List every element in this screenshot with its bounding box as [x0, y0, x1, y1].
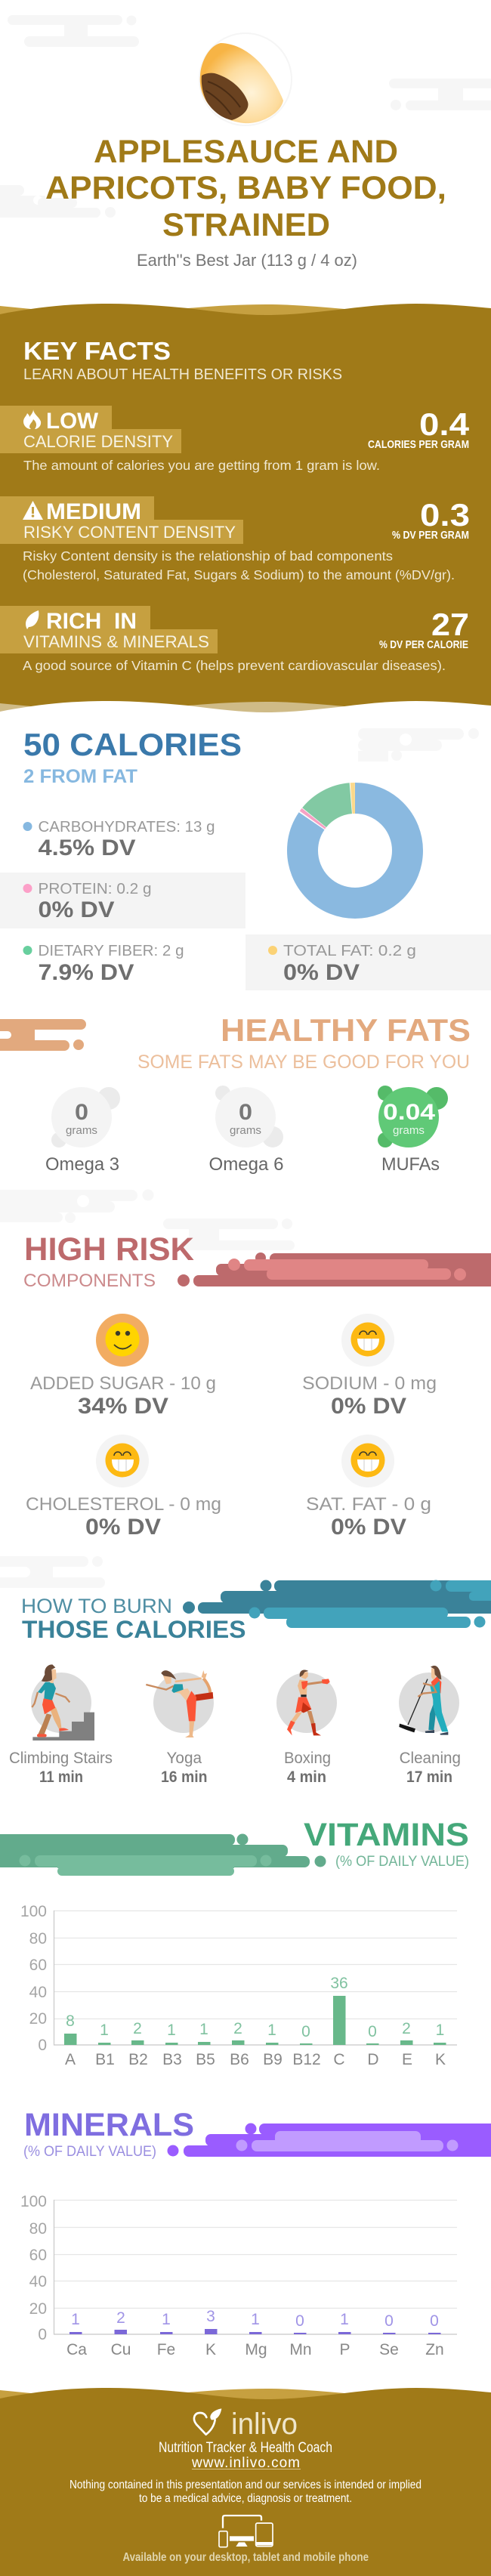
- fact: low calorie density: The amount of calories you are getting from 1 gram is low.: [23, 458, 380, 473]
- bar chart: minerals: 80: [29, 2220, 47, 2238]
- icon: boxer: [287, 1670, 330, 1735]
- heading: minerals: MINERALS: [24, 2107, 194, 2143]
- bar chart: minerals: K: [205, 2341, 216, 2358]
- bar chart: minerals: 1: [71, 2311, 80, 2328]
- bar chart: vitamins: C: [333, 2051, 345, 2068]
- bar chart: vitamins: 8: [66, 2012, 75, 2030]
- bar chart: minerals: 0: [295, 2312, 304, 2330]
- fact: medium risky content density: 0.3: [420, 497, 470, 533]
- item: total fat: 0% DV: [283, 960, 360, 985]
- icon: apricot: [199, 33, 292, 125]
- item: cholesterol: [26, 1435, 221, 1540]
- item: omega 6: [208, 1086, 284, 1175]
- disclaimer: [69, 2479, 422, 2505]
- disclaimer: Nothing contained in this presentation and our services is intended or implied: [69, 2479, 422, 2491]
- item: dietary fiber: [23, 943, 184, 985]
- bar chart: vitamins: B9: [263, 2051, 283, 2068]
- tagline: Nutrition Tracker & Health Coach: [159, 2440, 332, 2456]
- icon: warning triangle: [23, 501, 43, 520]
- activity: yoga: Yoga: [166, 1750, 202, 1767]
- bar chart: vitamins: B3: [162, 2051, 182, 2068]
- heading: healthy fats: HEALTHY FATS: [221, 1012, 471, 1048]
- fact: rich in vitamins and minerals: % DV PER CALORIE: [379, 639, 468, 651]
- bar chart: minerals: Ca: [66, 2341, 87, 2358]
- bar chart: minerals: 1: [162, 2311, 171, 2328]
- fact: rich in vitamins and minerals: VITAMINS & MINERALS: [23, 632, 209, 651]
- item: omega 3: [45, 1087, 120, 1175]
- subheading: LEARN ABOUT HEALTH BENEFITS OR RISKS: [23, 366, 342, 383]
- bar chart: minerals: P: [339, 2341, 350, 2358]
- fact: medium risky content density: RISKY CONTENT DENSITY: [23, 523, 236, 542]
- fact: medium risky content density: [0, 496, 470, 582]
- bar chart: minerals: 0: [384, 2312, 394, 2330]
- bar chart: minerals: Mn: [289, 2341, 312, 2358]
- disclaimer: to be a medical advice, diagnosis or treatment.: [139, 2492, 352, 2505]
- bar chart: vitamins: 60: [29, 1957, 47, 1974]
- bar chart: vitamins: 40: [29, 1984, 47, 2001]
- bar chart: vitamins: A: [65, 2051, 76, 2068]
- item: MUFAs: MUFAs: [381, 1154, 440, 1175]
- item: sodium: [302, 1314, 437, 1419]
- bar chart: minerals: [20, 2193, 457, 2358]
- icon: woman on stairs: [32, 1664, 94, 1740]
- bar chart: vitamins: B12: [292, 2051, 321, 2068]
- activity: boxing: 4 min: [287, 1768, 326, 1786]
- bar chart: vitamins: B6: [230, 2051, 249, 2068]
- panel: healthy fats: [0, 1012, 471, 1175]
- bar chart: vitamins: 1: [199, 2021, 208, 2038]
- subheading: from fat: 2 FROM FAT: [23, 766, 137, 787]
- activity: climbing stairs: [9, 1664, 113, 1786]
- item: total fat: [268, 943, 416, 985]
- title: [45, 134, 446, 243]
- item: MUFAs: [378, 1086, 448, 1175]
- item: MUFAs: grams: [393, 1124, 425, 1137]
- panel: vitamins: [0, 1817, 469, 2068]
- activity: cleaning: 17 min: [406, 1768, 452, 1786]
- bar chart: vitamins: 1: [267, 2022, 276, 2039]
- item: added sugar: [30, 1314, 216, 1419]
- panel: key facts: [0, 304, 491, 721]
- icon: woman in yoga pose: [146, 1670, 213, 1737]
- activity: boxing: [276, 1670, 337, 1786]
- decoration: green cloud: [0, 1834, 326, 1876]
- bar chart: minerals: Se: [379, 2341, 399, 2358]
- subheading: (% OF DAILY VALUE): [335, 1854, 469, 1870]
- decoration: teal cloud: [183, 1580, 491, 1628]
- heading: 50 calories: 50 CALORIES: [23, 727, 242, 762]
- bar chart: vitamins: 2: [133, 2020, 142, 2037]
- fact: medium risky content density: MEDIUM: [46, 499, 141, 524]
- heading: those calories: THOSE CALORIES: [22, 1616, 246, 1643]
- activity: yoga: 16 min: [161, 1768, 207, 1786]
- heading: key facts: KEY FACTS: [23, 337, 171, 365]
- icon: inlivo heart logo: [194, 2408, 221, 2435]
- item: omega 6: grams: [230, 1124, 261, 1137]
- bar chart: vitamins: E: [402, 2051, 412, 2068]
- bar chart: vitamins: 20: [29, 2010, 47, 2028]
- icon: leaf: [26, 610, 39, 629]
- fact: rich in vitamins and minerals: RICH IN: [46, 609, 137, 634]
- bar chart: vitamins: 1: [100, 2022, 109, 2039]
- subheading: SOME FATS MAY BE GOOD FOR YOU: [137, 1052, 470, 1073]
- bar chart: minerals: Mg: [245, 2341, 267, 2358]
- bar chart: vitamins: 0: [38, 2037, 47, 2054]
- bar chart: vitamins: D: [367, 2051, 379, 2068]
- bar chart: vitamins: K: [435, 2051, 446, 2068]
- bar chart: minerals: Fe: [157, 2341, 175, 2358]
- activity: yoga: [146, 1670, 214, 1786]
- item: dietary fiber: DIETARY FIBER: 2 g: [38, 943, 184, 959]
- bar chart: vitamins: 2: [402, 2020, 411, 2037]
- bar chart: minerals: Cu: [111, 2341, 131, 2358]
- decoration: purple cloud: [168, 2123, 491, 2157]
- website link: www.inlivo.com: [191, 2455, 300, 2471]
- fact: medium risky content density: (Cholesterol, Saturated Fat, Sugars & Sodium) to the amount (%DV/gr).: [23, 567, 455, 582]
- availability note: Available on your desktop, tablet and mobile phone: [122, 2551, 369, 2564]
- item: protein: 0% DV: [38, 897, 115, 922]
- fact: rich in vitamins and minerals: [0, 606, 469, 673]
- item: carbohydrates: 4.5% DV: [38, 836, 136, 860]
- fact: low calorie density: [0, 406, 470, 473]
- item: cholesterol: 0% DV: [85, 1515, 161, 1540]
- title: APPLESAUCE AND: [94, 134, 398, 170]
- activity: climbing stairs: 11 min: [39, 1768, 83, 1786]
- icon: devices: [219, 2516, 273, 2547]
- bar chart: vitamins: 0: [301, 2023, 310, 2040]
- bar chart: vitamins: 0: [368, 2023, 377, 2040]
- heading: high risk: HIGH RISK: [24, 1231, 194, 1268]
- item: protein: [23, 881, 151, 922]
- item: MUFAs: 0.04: [383, 1100, 435, 1125]
- bar chart: vitamins: 80: [29, 1930, 47, 1947]
- bar chart: vitamins: 1: [436, 2022, 444, 2039]
- bar chart: vitamins: 2: [233, 2020, 242, 2037]
- bar chart: minerals: 0: [38, 2326, 47, 2343]
- fact: rich in vitamins and minerals: A good source of Vitamin C (helps prevent cardiovascular diseases).: [23, 658, 446, 673]
- logo text: inlivo: [231, 2408, 298, 2441]
- fact: low calorie density: 0.4: [419, 406, 470, 442]
- item: total fat: TOTAL FAT: 0.2 g: [283, 943, 416, 959]
- bar chart: minerals: 1: [340, 2311, 349, 2328]
- item: dietary fiber: 7.9% DV: [38, 960, 134, 985]
- fact: low calorie density: CALORIES PER GRAM: [368, 439, 469, 451]
- bar chart: minerals: 100: [20, 2193, 47, 2210]
- item: sodium: SODIUM - 0 mg: [302, 1373, 437, 1394]
- bar chart: minerals: 60: [29, 2247, 47, 2264]
- fact: low calorie density: CALORIE DENSITY: [23, 432, 173, 451]
- fact: medium risky content density: Risky Content density is the relationship of bad components: [23, 548, 393, 564]
- bar chart: vitamins: B5: [196, 2051, 215, 2068]
- bar chart: vitamins: B1: [95, 2051, 115, 2068]
- panel: minerals: [20, 2107, 491, 2358]
- header section: [0, 15, 491, 270]
- item: omega 3: 0: [75, 1100, 88, 1125]
- item: carbohydrates: CARBOHYDRATES: 13 g: [38, 819, 215, 836]
- icon: woman sweeping: [399, 1666, 448, 1735]
- panel: footer: [0, 2388, 491, 2576]
- decoration: risk cloud: [178, 1252, 491, 1286]
- item: omega 3: grams: [66, 1124, 97, 1137]
- item: omega 6: 0: [239, 1100, 252, 1125]
- item: saturated fat: [306, 1435, 431, 1540]
- title: STRAINED: [162, 207, 330, 243]
- activity: cleaning: [399, 1666, 461, 1786]
- bar chart: vitamins: 100: [20, 1903, 47, 1920]
- subheading: components: COMPONENTS: [23, 1271, 156, 1291]
- item: added sugar: 34% DV: [78, 1394, 168, 1419]
- item: cholesterol: CHOLESTEROL - 0 mg: [26, 1494, 221, 1515]
- decoration: fats cloud: [0, 1019, 86, 1051]
- bar chart: minerals: 2: [116, 2309, 125, 2327]
- heading: how to burn: HOW TO BURN: [21, 1595, 172, 1617]
- item: carbohydrates: [23, 819, 215, 860]
- bar chart: vitamins: 1: [167, 2022, 176, 2039]
- fact: low calorie density: LOW: [46, 409, 99, 434]
- icon: flame: [23, 409, 41, 429]
- bar chart: minerals: 3: [206, 2308, 215, 2325]
- panel: high risk: [0, 1189, 491, 1540]
- bar chart: minerals: 40: [29, 2273, 47, 2290]
- item: saturated fat: 0% DV: [331, 1515, 406, 1540]
- item: added sugar: ADDED SUGAR - 10 g: [30, 1373, 216, 1394]
- title: APRICOTS, BABY FOOD,: [45, 170, 446, 206]
- item: protein: PROTEIN: 0.2 g: [38, 881, 151, 897]
- bar chart: vitamins: 36: [330, 1975, 348, 1992]
- bar chart: minerals: Zn: [425, 2341, 444, 2358]
- bar chart: minerals: 1: [251, 2311, 260, 2328]
- heading: vitamins: VITAMINS: [304, 1817, 469, 1853]
- activity: boxing: Boxing: [284, 1750, 331, 1767]
- bar chart: vitamins: B2: [128, 2051, 148, 2068]
- donut chart: [302, 798, 408, 903]
- subtitle: Earth''s Best Jar (113 g / 4 oz): [137, 251, 357, 270]
- bar chart: minerals: 20: [29, 2300, 47, 2318]
- item: sodium: 0% DV: [331, 1394, 406, 1419]
- subheading: (% OF DAILY VALUE): [23, 2144, 156, 2160]
- item: saturated fat: SAT. FAT - 0 g: [306, 1494, 431, 1515]
- bar chart: minerals: 0: [430, 2312, 439, 2330]
- bar chart: vitamins: [20, 1903, 457, 2068]
- fact: medium risky content density: % DV PER GRAM: [392, 530, 469, 542]
- panel: calories: [0, 727, 491, 990]
- activity: climbing stairs: Climbing Stairs: [9, 1750, 113, 1767]
- activity: cleaning: Cleaning: [400, 1750, 461, 1767]
- item: omega 6: Omega 6: [208, 1154, 284, 1175]
- fact: rich in vitamins and minerals: 27: [431, 607, 469, 642]
- panel: how to burn calories: [0, 1556, 491, 1786]
- item: omega 3: Omega 3: [45, 1154, 119, 1175]
